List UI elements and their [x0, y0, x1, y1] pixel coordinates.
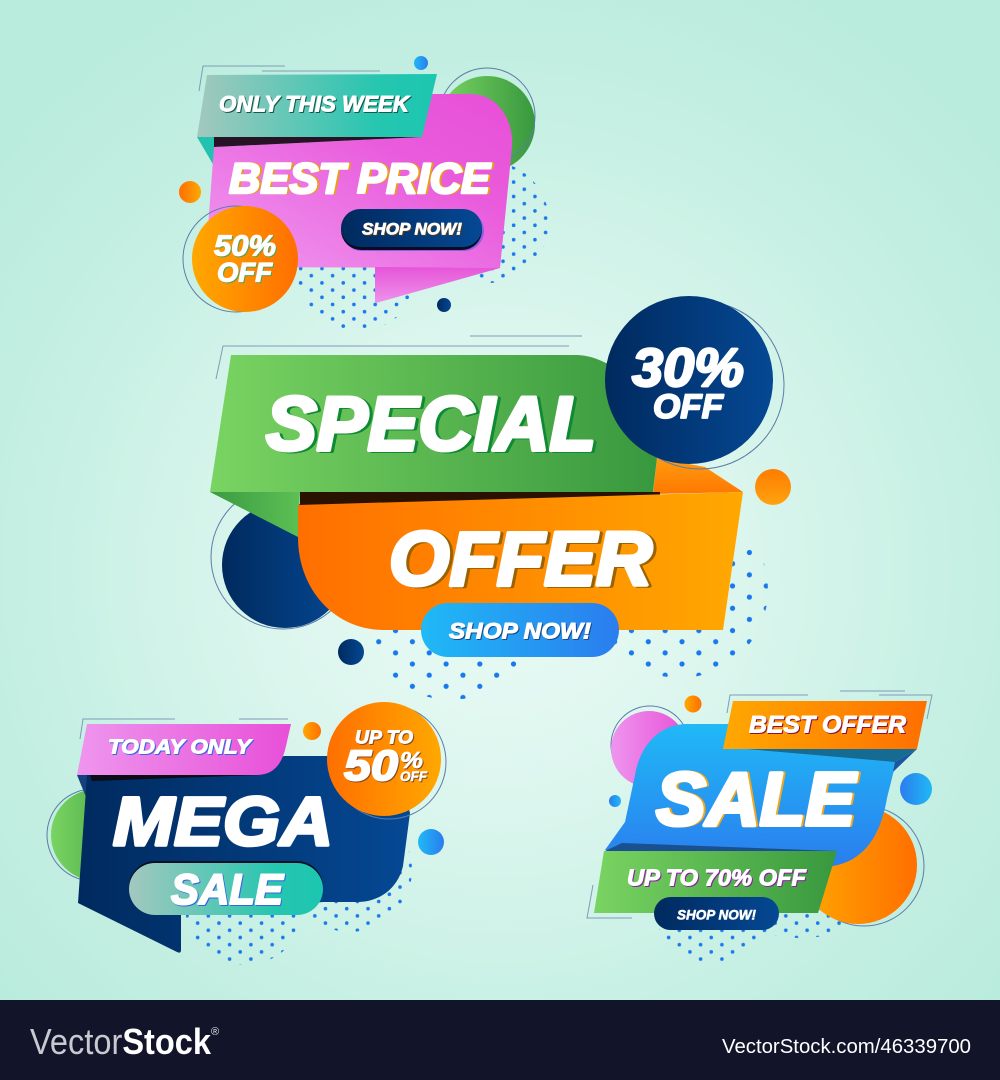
- dot pattern: [370, 502, 768, 700]
- discount badge: OFF: [653, 388, 724, 426]
- green circle: [47, 789, 139, 881]
- panel: mega sale banner: [47, 702, 446, 965]
- pink ribbon: [77, 724, 291, 775]
- button: shop now: [341, 209, 484, 251]
- panel: sale banner: [587, 691, 932, 963]
- discount badge: UP TO: [355, 728, 413, 748]
- discount badge: OFF: [400, 768, 427, 784]
- discount badge: [605, 296, 784, 469]
- discount badge: [183, 206, 298, 312]
- button: shop now: [421, 603, 619, 657]
- ribbon text: UP TO 70% OFF: [627, 864, 807, 890]
- button: shop now: [654, 897, 779, 930]
- icon: orange dot: [303, 722, 321, 740]
- pill: sale: SALE: [171, 867, 285, 914]
- discount badge: 50%: [214, 230, 276, 262]
- button: shop now: SHOP NOW!: [362, 220, 462, 238]
- blue banner shape: [605, 724, 897, 867]
- icon: orange dot: [684, 696, 702, 712]
- discount badge: [327, 702, 446, 819]
- ribbon fold: [197, 137, 214, 166]
- pink banner shape: [205, 94, 512, 268]
- button: shop now: SHOP NOW!: [677, 908, 756, 924]
- ribbon shadow: [747, 749, 917, 762]
- panel: best price banner: [179, 56, 549, 331]
- dot pattern: [185, 808, 412, 965]
- heading: best price: BEST PRICE: [229, 155, 491, 203]
- teal ribbon: [197, 74, 437, 137]
- button: shop now: SHOP NOW!: [449, 618, 591, 644]
- ribbon text: ONLY THIS WEEK: [219, 92, 411, 116]
- navy banner shape: [78, 756, 410, 953]
- registered mark: ®: [211, 1026, 219, 1038]
- green circle: [439, 76, 535, 172]
- discount badge: OFF: [217, 258, 274, 288]
- green fold: [210, 492, 300, 537]
- green ribbon: [210, 355, 657, 492]
- discount badge: %: [400, 747, 423, 773]
- navy fold: [77, 775, 90, 802]
- orange ribbon: [298, 492, 743, 630]
- icon: navy dot: [437, 298, 451, 312]
- ribbon shadow: [214, 137, 422, 147]
- dot pattern: [654, 832, 885, 963]
- discount badge: 50: [344, 743, 398, 790]
- icon: large blue dot: [900, 773, 932, 805]
- orange circle: [804, 806, 924, 926]
- icon: navy dot: [338, 639, 364, 665]
- icon: blue dot: [418, 829, 444, 855]
- ribbon shadow: [300, 492, 660, 507]
- ribbon shadow: [90, 775, 260, 781]
- icon: small blue dot: [609, 795, 621, 807]
- orange ribbon: [723, 701, 927, 749]
- green ribbon: [594, 851, 837, 913]
- discount badge: 30%: [632, 338, 744, 398]
- source url: VectorStock.com/46339700: [722, 1036, 971, 1058]
- heading: mega: MEGA: [113, 783, 333, 860]
- pink tail: [375, 267, 500, 303]
- footer band: [0, 1000, 1000, 1080]
- navy circle: [211, 485, 355, 629]
- pink circle: [611, 706, 689, 784]
- icon: orange dot: [755, 469, 791, 505]
- heading: offer: OFFER: [389, 517, 652, 602]
- panel: special offer banner: [210, 296, 791, 700]
- green ribbon shadow: [605, 843, 837, 851]
- icon: blue dot: [414, 56, 428, 70]
- heading: sale: SALE: [656, 757, 858, 841]
- icon: orange dot: [179, 181, 201, 203]
- ribbon text: BEST OFFER: [749, 712, 906, 738]
- ribbon text: TODAY ONLY: [108, 736, 254, 758]
- logo wordmark: VectorStock: [30, 1021, 212, 1062]
- pill: sale: [129, 861, 323, 915]
- dot pattern: [296, 161, 549, 331]
- heading: special: SPECIAL: [266, 382, 596, 467]
- orange fold: [653, 458, 743, 494]
- folded edge: [893, 749, 917, 772]
